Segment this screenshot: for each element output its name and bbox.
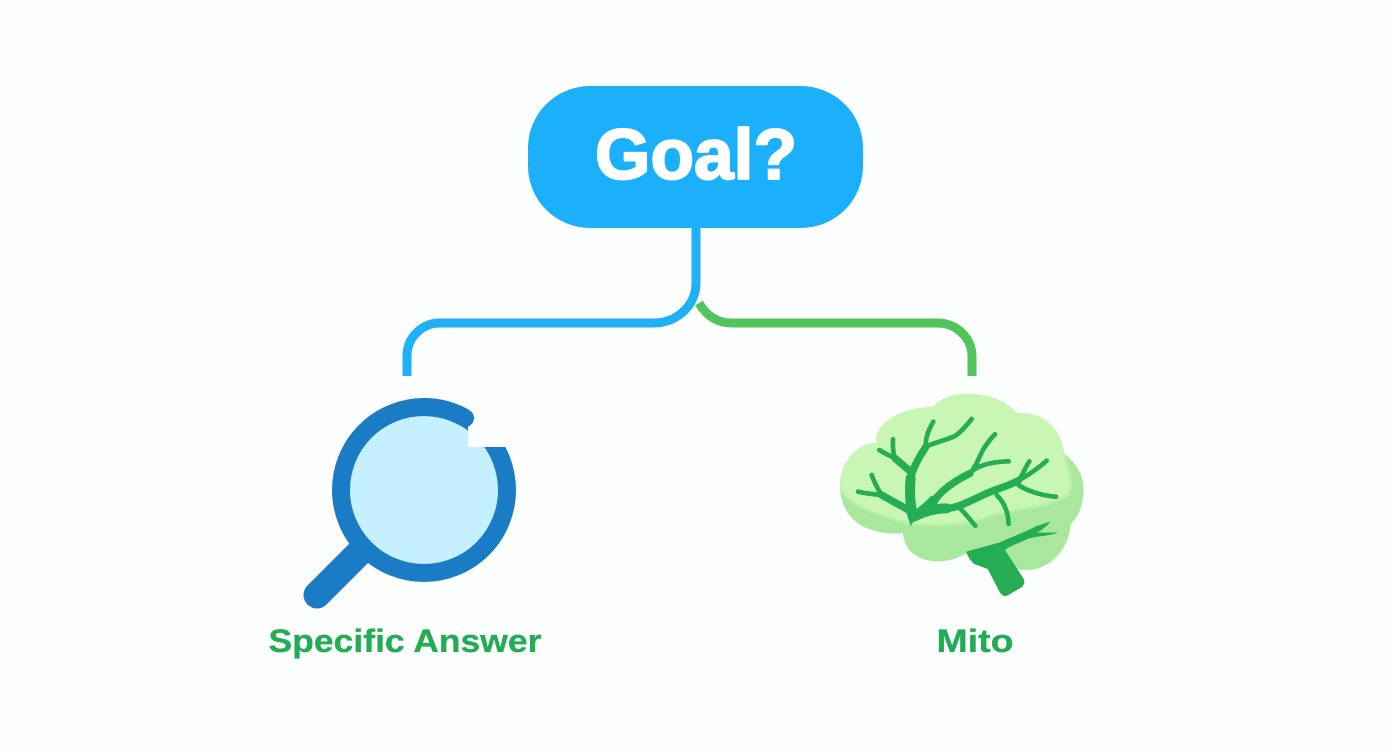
main trunks (910, 478, 947, 517)
connector: blue branch to Specific Answer (407, 226, 696, 376)
decision node: Goal? (528, 86, 863, 228)
connector: green branch to Mito (699, 303, 972, 376)
label: Specific Answer: Specific Answer (268, 623, 542, 659)
label: Mito: Mito (936, 623, 1014, 659)
icon: green brain with branching network (830, 387, 1084, 596)
node label: Goal? (595, 116, 797, 195)
icon: magnifying glass (317, 400, 518, 595)
